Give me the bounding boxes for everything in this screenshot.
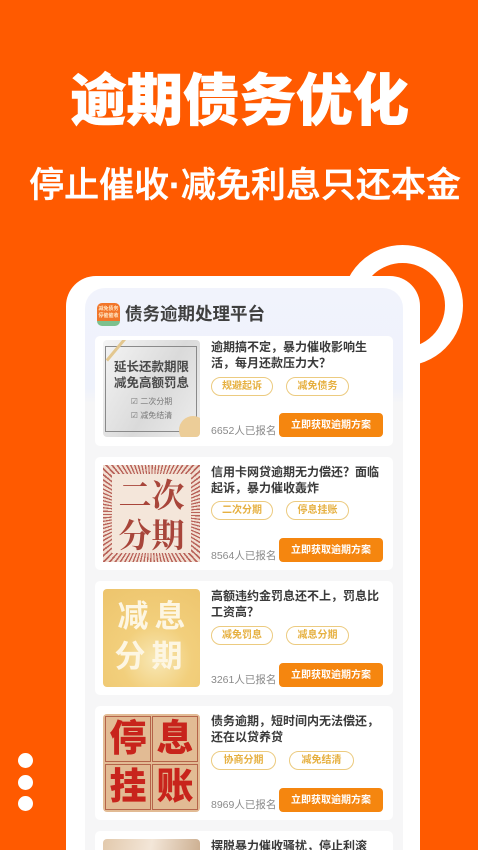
button [279, 413, 383, 437]
tags [211, 626, 273, 645]
image: extend repayment: 减免高额罚息 [114, 376, 189, 390]
image: interest reduction [103, 589, 200, 687]
question text [211, 465, 379, 495]
question text: 活，每月还款压力大？ [211, 356, 331, 370]
image: pause interest [103, 714, 200, 812]
card 1 [95, 336, 393, 446]
enrolled count: 8969人已报名 [211, 799, 276, 811]
tags: 减免罚息 [222, 630, 262, 641]
tags [211, 501, 273, 520]
tags [211, 751, 276, 770]
button [279, 788, 383, 812]
card 1: 减免债务 [298, 381, 338, 392]
button [279, 663, 383, 687]
button: 立即获取逾期方案 [291, 545, 371, 556]
carousel dots [18, 753, 33, 811]
app name: 债务逾期处理平台 [125, 304, 265, 324]
question text: 工资高？ [211, 605, 259, 619]
question text: 高额违约金罚息还不上，罚息比 [211, 589, 379, 603]
app icon: 减免债务 [98, 306, 118, 312]
enrolled count: 6652人已报名 [211, 425, 276, 437]
image: extend repayment: ☑ 减免结清 [131, 411, 172, 420]
subtitle: 停止催收·减免利息只还本金 [29, 166, 461, 205]
app icon: 停催催收 [98, 312, 118, 318]
phone screen [85, 288, 403, 850]
image: second installment [103, 465, 200, 562]
image: second installment: 二次 [118, 470, 184, 517]
question text: 债务逾期，短时间内无法偿还， [211, 714, 379, 728]
question text [211, 340, 367, 370]
button [279, 538, 383, 562]
image: pause interest: 停 [110, 718, 146, 759]
button: 立即获取逾期方案 [291, 795, 371, 806]
tags: 协商分期 [224, 755, 264, 766]
image: extend repayment: 延长还款期限 [114, 360, 189, 374]
card 4: 减免结清 [302, 755, 342, 766]
image: pause interest: 挂 [110, 766, 146, 807]
image: extend repayment [103, 340, 200, 437]
app icon [97, 303, 120, 326]
card 5 [95, 831, 393, 850]
card 2 [95, 457, 393, 570]
image: interest reduction: 分期 [114, 639, 188, 674]
image: second installment: 分期 [118, 510, 184, 557]
card 3: 减息分期 [298, 630, 338, 641]
image: interest reduction: 减息 [118, 599, 192, 634]
tags: 二次分期 [222, 505, 262, 516]
phone mockup [66, 276, 420, 850]
tags: 规避起诉 [222, 381, 262, 392]
question text: 起诉，暴力催收轰炸 [211, 481, 319, 495]
card 2: 停息挂账 [298, 505, 338, 516]
image: pause interest: 息 [156, 718, 194, 759]
decorative ring [342, 245, 463, 366]
question text [211, 714, 379, 744]
image: partially visible [103, 839, 200, 850]
question text: 还在以贷养贷 [211, 730, 283, 744]
question text: 信用卡网贷逾期无力偿还？面临 [211, 465, 379, 479]
image: pause interest: 账 [156, 766, 194, 807]
card 4 [95, 706, 393, 820]
tags [211, 377, 273, 396]
button: 立即获取逾期方案 [291, 670, 371, 681]
question text [211, 589, 379, 619]
enrolled count: 8564人已报名 [211, 550, 276, 562]
image: extend repayment: ☑ 二次分期 [131, 397, 172, 406]
enrolled count: 3261人已报名 [211, 674, 276, 686]
question text: 逾期搞不定，暴力催收影响生 [211, 340, 367, 354]
card 3 [95, 581, 393, 695]
button: 立即获取逾期方案 [291, 420, 371, 431]
title: 逾期债务优化 [70, 69, 409, 132]
